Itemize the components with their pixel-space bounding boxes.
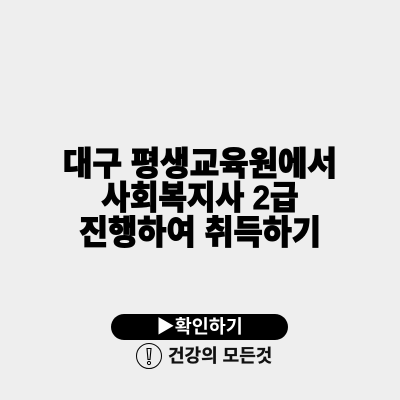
button: confirm: ▶확인하기 (156, 316, 243, 337)
button: confirm (111, 314, 288, 340)
title (63, 145, 337, 251)
title line 3: 진행하여 취득하기 (79, 214, 321, 251)
icon: exclamation circle (136, 343, 162, 369)
title line 2: 사회복지사 2급 (101, 179, 299, 216)
title line 1: 대구 평생교육원에서 (63, 145, 337, 182)
brand text: 건강의 모든것 (168, 346, 272, 366)
